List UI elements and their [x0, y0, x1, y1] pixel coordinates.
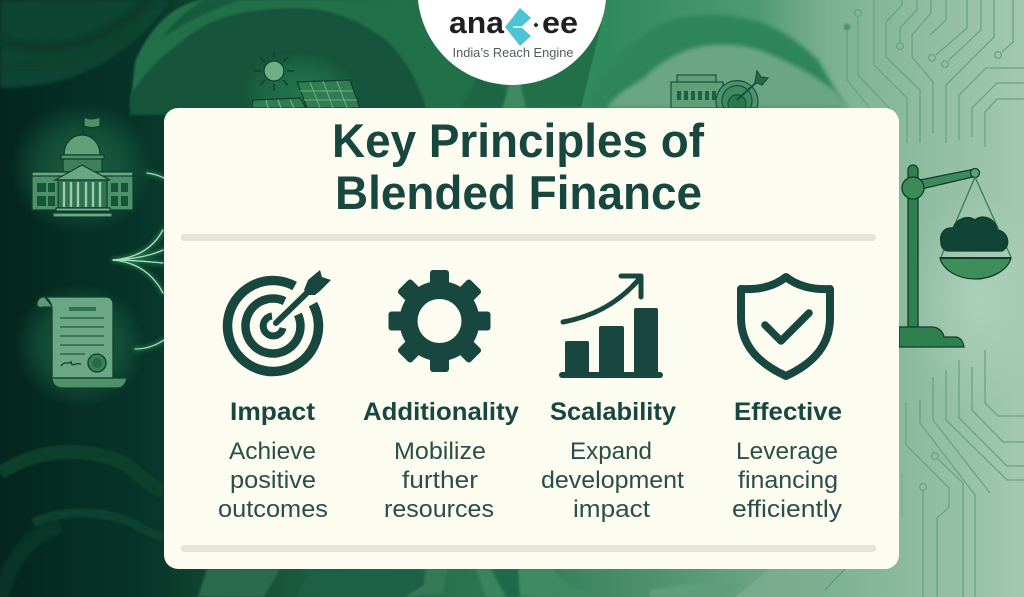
description: effective: efficiently: [732, 496, 842, 523]
icon: target with arrow: [228, 270, 331, 372]
title: Blended Finance: [335, 166, 702, 219]
description: impact: [218, 438, 328, 523]
icon: government building: [10, 102, 154, 234]
description: impact: positive: [230, 467, 316, 494]
panel: key principles card: [164, 108, 899, 569]
description: additionality: [384, 438, 494, 523]
icon: sun and solar panels: [242, 52, 360, 132]
description: effective: financing: [738, 467, 838, 494]
column: effective: [732, 277, 842, 523]
description: effective: Leverage: [736, 438, 838, 465]
column: scalability: [541, 276, 684, 523]
circuit lines: [844, 0, 1024, 597]
energy streaks: [113, 173, 164, 349]
icon: shield with check: [741, 277, 830, 376]
description: additionality: resources: [384, 496, 494, 523]
description: additionality: Mobilize: [394, 438, 486, 465]
description: scalability: impact: [573, 496, 650, 523]
icon: balance scale with cloud: [899, 165, 1011, 347]
logo wordmark: ee: [542, 5, 578, 40]
description: additionality: further: [402, 467, 478, 494]
description: scalability: [541, 438, 684, 523]
description: impact: outcomes: [218, 496, 328, 523]
logo wordmark: [449, 5, 578, 46]
icon: gear: [388, 270, 490, 372]
logo tagline: India’s Reach Engine: [452, 46, 574, 60]
title: Key Principles of: [332, 114, 704, 167]
logo badge: [418, 0, 606, 85]
description: effective: [732, 438, 842, 523]
title: [332, 114, 704, 219]
heading: scalability: Scalability: [550, 398, 676, 426]
icon: rising bar chart: [562, 276, 660, 375]
heading: effective: Effective: [734, 398, 842, 426]
icon: signed scroll document: [14, 283, 146, 407]
column: impact: [218, 270, 331, 523]
heading: impact: Impact: [230, 398, 316, 426]
description: scalability: development: [541, 467, 684, 494]
description: impact: Achieve: [229, 438, 316, 465]
logo wordmark: ana: [449, 5, 505, 40]
heading: additionality: Additionality: [363, 398, 519, 426]
icon: building with target: [671, 71, 768, 108]
bottom divider: [181, 545, 876, 552]
top divider: [181, 234, 876, 241]
column: additionality: [363, 270, 519, 523]
description: scalability: Expand: [570, 438, 652, 465]
